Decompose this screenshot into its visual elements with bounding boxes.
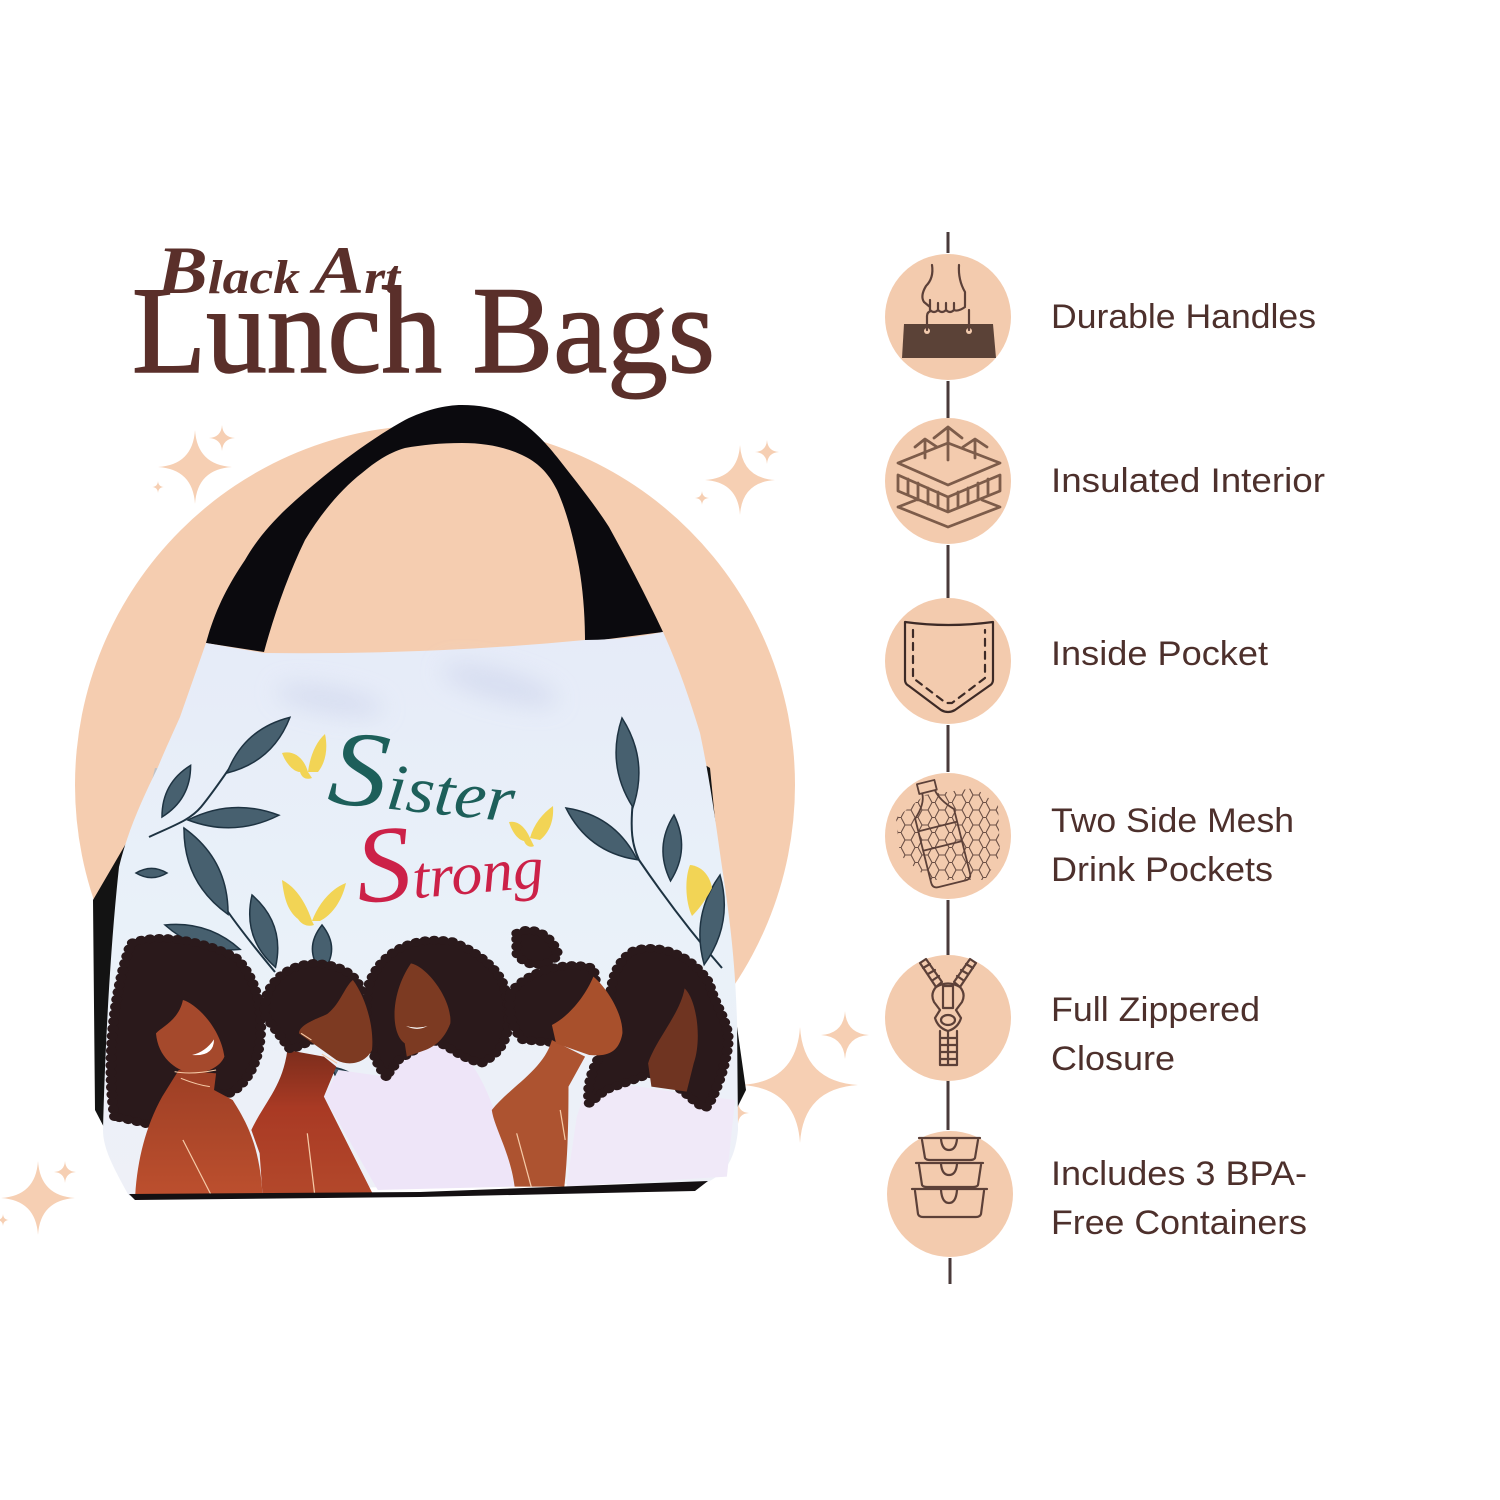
bag handles — [206, 405, 663, 652]
icon: bottle on mesh — [896, 777, 1000, 889]
feature label: Durable Handles — [1051, 298, 1316, 336]
icon: zipper — [920, 959, 976, 1065]
woman two torso and hair — [251, 963, 373, 1195]
feature label: Free Containers — [1051, 1204, 1307, 1242]
circle badge — [885, 418, 1011, 544]
woman four torso, bun and hair — [492, 930, 622, 1187]
five women illustration — [111, 930, 735, 1195]
feature label: Closure — [1051, 1040, 1175, 1078]
bag print text: Sister: Sister — [324, 708, 522, 846]
sparkles — [0, 425, 869, 1235]
feature: full zippered closure — [885, 955, 1260, 1081]
feature: insulated interior — [885, 418, 1325, 544]
circle badge — [887, 1131, 1013, 1257]
heading: Black Art Lunch Bags — [132, 232, 715, 399]
peach background circle — [75, 425, 795, 1145]
script title line: Black Art — [156, 232, 402, 308]
icon: insulation layers — [898, 427, 1000, 527]
icon: stitched pocket — [905, 622, 993, 712]
side mesh pockets — [93, 763, 746, 1135]
circle badge — [885, 773, 1011, 899]
feature label: Inside Pocket — [1051, 635, 1269, 673]
bag bottom trim — [129, 1181, 708, 1200]
feature label — [1051, 802, 1294, 889]
feature: includes 3 BPA-free containers — [887, 1131, 1307, 1257]
feature label — [1051, 991, 1260, 1078]
circle badge — [885, 955, 1011, 1081]
yellow butterflies — [282, 734, 712, 926]
feature label: Includes 3 BPA- — [1051, 1155, 1307, 1193]
lunch bag product illustration — [93, 405, 746, 1200]
circle badge — [885, 598, 1011, 724]
feature label: Full Zippered — [1051, 991, 1260, 1029]
fabric fold shadows — [274, 656, 562, 721]
feature label: Insulated Interior — [1051, 462, 1325, 500]
circle badge — [885, 254, 1011, 380]
feature: two side mesh drink pockets — [885, 773, 1294, 899]
woman three shirt and hair — [324, 940, 515, 1190]
feature label: Two Side Mesh — [1051, 802, 1294, 840]
vertical timeline line — [948, 232, 950, 1284]
leaf branches — [136, 709, 731, 1114]
bag print text: Strong: Strong — [350, 792, 547, 927]
feature: inside pocket — [885, 598, 1269, 724]
feature label — [1051, 1155, 1307, 1242]
serif title line: Lunch Bags — [132, 262, 715, 399]
woman five shirt and hair — [566, 948, 735, 1187]
feature label: Drink Pockets — [1051, 851, 1273, 889]
icon: stacked containers — [912, 1138, 987, 1217]
feature: durable handles — [885, 254, 1316, 380]
icon: hand holding bag — [902, 265, 996, 358]
gray side flap — [140, 768, 175, 830]
woman one torso and hair — [111, 938, 263, 1195]
bag body — [103, 632, 738, 1196]
